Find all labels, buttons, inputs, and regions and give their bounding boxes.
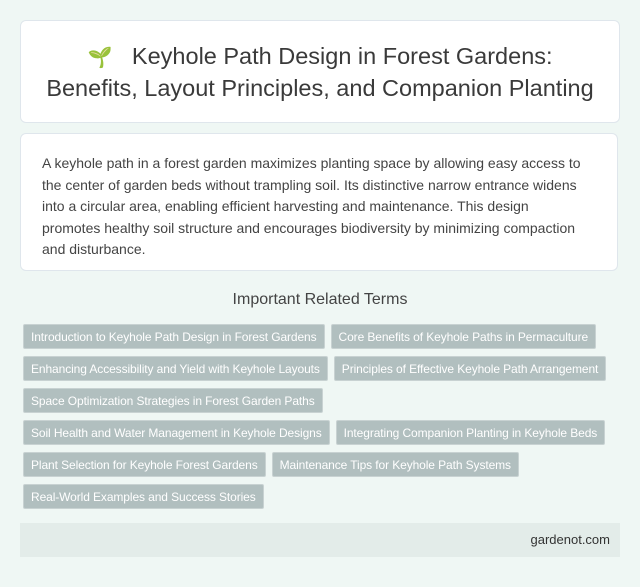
tags: Space Optimization Strategies in Forest Garden Paths: [31, 394, 315, 408]
title: [20, 20, 620, 123]
tags: Maintenance Tips for Keyhole Path Systems: [280, 458, 511, 472]
title: 🌱 Keyhole Path Design in Forest Gardens:: [87, 42, 553, 68]
title: Benefits, Layout Principles, and Companion Planting: [46, 74, 594, 100]
description text: A keyhole path in a forest garden maximizes planting space by allowing easy access to the center of garden beds without trampling soil. Its distinctive narrow entrance widens into a circular area, enabling efficient harvesting and maintenance. This design promotes healthy soil structure and encourages biodiversity by minimizing compaction and disturbance.: [42, 155, 581, 257]
tags: [23, 324, 606, 509]
tags: Soil Health and Water Management in Keyhole Designs: [31, 426, 322, 440]
tags: Plant Selection for Keyhole Forest Gardens: [31, 458, 258, 472]
footer: [20, 523, 620, 557]
heading: related terms: Important Related Terms: [233, 291, 407, 308]
tags: Enhancing Accessibility and Yield with Keyhole Layouts: [31, 362, 320, 376]
description text: [20, 133, 618, 271]
footer: gardenot.com: [530, 532, 610, 547]
tags: Real-World Examples and Success Stories: [31, 490, 256, 504]
tags: Introduction to Keyhole Path Design in Forest Gardens: [31, 330, 317, 344]
tags: Principles of Effective Keyhole Path Arrangement: [342, 362, 598, 376]
tags: Core Benefits of Keyhole Paths in Permaculture: [339, 330, 588, 344]
tags: Integrating Companion Planting in Keyhole Beds: [344, 426, 597, 440]
